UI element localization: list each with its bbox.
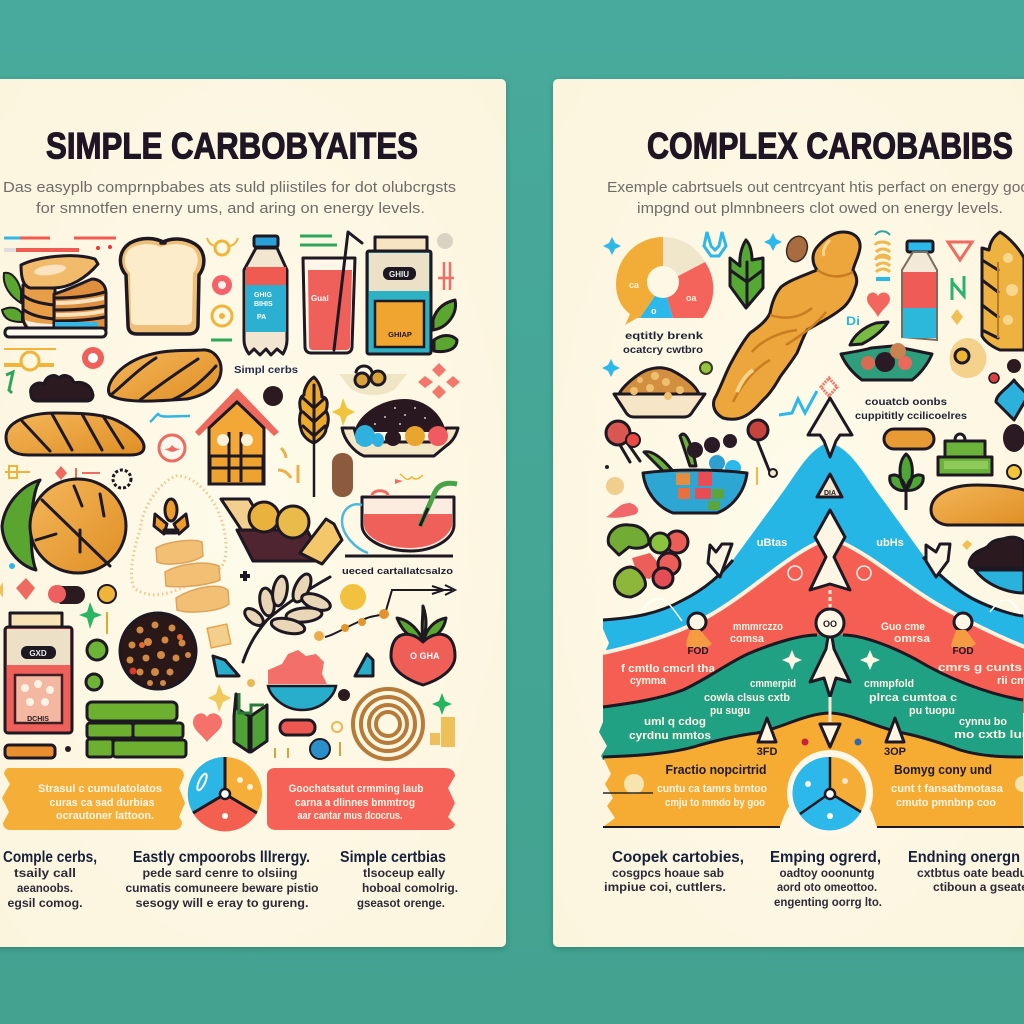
- intro text: simple carbs: Das easyplb comprnpbabes ats suld pliistiles for dot olubcrgsts: [3, 179, 456, 196]
- label: simple carbs: Simpl cerbs: [234, 365, 298, 376]
- caption: column 2: pede sard cenre to olsiing: [142, 868, 298, 880]
- intro text: complex carbs: Exemple cabrtsuels out centrcyant htis perfact on energy goo: [607, 179, 1024, 196]
- layer: red: mmmrczzo: [733, 621, 783, 633]
- layer: green: plrca cumtoa c: [869, 692, 957, 704]
- icon: wheat stalk: [300, 377, 328, 497]
- icon: big braided bread: [714, 232, 860, 419]
- icon: grain sprig in sack: [154, 499, 188, 534]
- caption: right column 1: cosgpcs hoaue sab: [612, 868, 724, 880]
- pie: yellow blue red: [188, 757, 262, 831]
- caption: column 3: [340, 849, 458, 910]
- small accent marks top left: [4, 238, 116, 250]
- label: complex carbs: [855, 396, 967, 422]
- caption: column 2: [126, 849, 318, 910]
- caption: column 3: tlsoceup eally: [363, 868, 446, 880]
- icon: golden sun: [950, 338, 987, 378]
- banner: yellow note: ocrautoner lattoon.: [56, 810, 154, 822]
- icon: growth line: [314, 585, 455, 641]
- icon: milk bottle: [244, 236, 287, 355]
- icon: ring marks: [757, 465, 1021, 485]
- caption: right column 2: engenting oorrg lto.: [774, 897, 882, 909]
- banner: red note: carna a dlinnes bmmtrog: [295, 797, 415, 809]
- layer: yellow: Bomyg cony und: [894, 762, 992, 777]
- triangle label: [817, 474, 842, 497]
- icon: small balls: [700, 359, 1021, 383]
- icon: bread slice: [120, 238, 204, 334]
- panel: simple carbohydrates: [0, 79, 506, 947]
- icon: cereal box: [367, 237, 457, 354]
- caption: right column 1: [604, 849, 744, 894]
- banner: red note: [267, 768, 455, 830]
- icon: red heart: [867, 292, 890, 317]
- arrow: down triangle: [758, 697, 904, 747]
- icon: dotted grain sack: [132, 476, 226, 595]
- caption: column 2: sesogy will e eray to gureng.: [136, 898, 308, 910]
- icon: black berries in bowl: [962, 537, 1024, 593]
- icon: green bowl with olives: [841, 322, 932, 380]
- label: slightly breaks: ocatcry cwtbro: [623, 344, 703, 356]
- intro text: simple carbs: [3, 179, 456, 217]
- icons: small yellow curls and teal bar: [875, 231, 890, 279]
- icon: blue shards: [213, 654, 373, 676]
- icon: bar below package: [5, 745, 71, 758]
- label: carb note: ueced cartallatcsalzo: [342, 566, 453, 577]
- dots and sparkles middle: [0, 563, 250, 690]
- pins: left and right: [640, 599, 1020, 657]
- icons: small medallions column: [207, 233, 454, 340]
- icon: bread basket: [221, 499, 342, 564]
- icon: plate of beans and fruits: [342, 399, 458, 456]
- layer: yellow: cunt t fansatbmotasa: [891, 783, 1004, 795]
- layer: yellow: 3FD: [757, 746, 777, 758]
- arrow: middle diamond: [810, 510, 850, 590]
- badge: center circle: OO: [823, 619, 837, 629]
- icon: heart tomato: O GHA: [410, 651, 440, 661]
- icon: blue orb and dots: [208, 679, 452, 759]
- icon: salad bowl: [643, 434, 747, 513]
- icon: black ball: [263, 386, 283, 406]
- banner: red note: Goochatsatut crmming laub: [288, 783, 424, 795]
- icon: heart: [193, 713, 222, 742]
- caption: column 1: egsil comog.: [8, 898, 82, 910]
- icon: twisted loaf: [108, 350, 221, 401]
- caption: right column 2: oadtoy ooonuntg: [780, 868, 874, 880]
- caption: right column 2: [770, 849, 882, 909]
- banner: yellow note: [2, 768, 185, 830]
- icon: cereal box: GHIAP: [388, 330, 412, 339]
- layer: red: comsa: [730, 633, 765, 645]
- icon: snack package: DCHIS: [27, 716, 49, 723]
- caption: column 3: Simple certbias: [340, 849, 446, 866]
- caption: right column 2: aord oto omeottoo.: [777, 882, 877, 894]
- layer: red: cmrs g cunts: [938, 662, 1022, 674]
- icon: corn bread: [982, 232, 1024, 350]
- icon: nuts tray: [614, 368, 705, 417]
- layer: green: uml q cdog: [644, 716, 706, 728]
- icon: complex bottle: [902, 241, 937, 340]
- icon: salmon diamond pattern: [418, 363, 460, 399]
- icon: green stacked box: [938, 434, 992, 475]
- icon: lentil bowl: [120, 613, 196, 689]
- layer: green: [599, 635, 1024, 760]
- icon: milk bottle: GHIG: [254, 292, 272, 299]
- arrow: lower: [810, 637, 850, 697]
- icon: bread slice inner: [125, 244, 198, 325]
- layer: yellow: cuntu ca tamrs brntoo: [657, 783, 767, 795]
- banner: yellow note: Strasul c cumulatolatos: [38, 783, 162, 795]
- layer: blue: [603, 442, 1024, 667]
- label: slightly breaks: [623, 330, 703, 356]
- layer: blue: uBtas: [757, 537, 787, 549]
- caption: column 2: Eastly cmpoorobs lllrergy.: [133, 849, 310, 866]
- caption: column 3: hoboal comolrig.: [362, 883, 458, 895]
- icon: green tree: [890, 454, 923, 510]
- icon: complex baguette: [931, 485, 1024, 525]
- layer: yellow: 3OP: [884, 746, 906, 758]
- icons: mini grain leaves: [278, 448, 298, 483]
- chart: donut pie: o: [651, 306, 657, 316]
- layer: green: cmmerpid: [750, 678, 796, 690]
- layer: yellow: cmuto pmnbnp coo: [896, 797, 996, 809]
- icon: coil: [353, 689, 423, 759]
- icon: triangle and marks: [948, 242, 972, 325]
- arrows: side chevrons: [708, 544, 950, 577]
- layer: blue: ubHs: [876, 537, 904, 549]
- icon: broccoli group: [608, 525, 688, 597]
- layer: red: cymma: [630, 675, 667, 687]
- layer: yellow: cmju to mmdo by goo: [665, 797, 765, 809]
- icon: brown nut: [783, 233, 811, 265]
- caption: column 1: [3, 849, 97, 910]
- layer: yellow: [603, 713, 1024, 827]
- layer: red: f cmtlo cmcrl tha: [621, 663, 716, 675]
- layer: green: mo cxtb luu: [954, 729, 1024, 741]
- caption: column 3: gseasot orenge.: [357, 898, 445, 910]
- icon: pancake stack: [2, 256, 106, 337]
- icon: cereal box: GHIU: [389, 270, 409, 279]
- panel: complex carbohydrates: [553, 79, 1024, 947]
- layer: red: [603, 543, 1024, 713]
- icon: wheat-leaf box: [234, 693, 267, 752]
- icon: juice glass with straw: [303, 232, 362, 353]
- badge: center circle: [816, 590, 844, 637]
- icon: wave and ring: [150, 414, 190, 461]
- layer: green: cmmpfold: [864, 678, 914, 690]
- icon: small dark roll: [332, 453, 353, 497]
- icon: heart tomato: [391, 606, 455, 685]
- label dots: iD: Di: [846, 314, 860, 328]
- chart: donut pie: ca: [629, 280, 640, 290]
- intro text: complex carbs: impgnd out plmnbneers clot owed on energy levels.: [637, 200, 1003, 217]
- layer: green: cynnu bo: [959, 716, 1007, 728]
- icon: blue zigzag and diamond: [779, 378, 837, 415]
- icon: house with grain: [195, 388, 279, 484]
- triangle label: DIA: [824, 490, 836, 497]
- icon: golden coin: [340, 584, 366, 610]
- caption: column 2: cumatis comuneere beware pistio: [126, 883, 318, 895]
- icon: blue leaf with berry: [996, 380, 1024, 452]
- icon: snack package: GXD: [29, 649, 47, 658]
- icon: complex pill: [884, 429, 934, 449]
- layer: green: pu sugu: [710, 705, 750, 717]
- title: simple carbs: SIMPLE CARBOBYAITES: [46, 126, 418, 166]
- caption: right column 3: ctiboun a gseate: [933, 882, 1024, 894]
- icon: wheat sprig: [242, 571, 332, 662]
- layer: red: omrsa: [894, 633, 931, 645]
- layer: green: cowla clsus cxtb: [704, 692, 790, 704]
- icon: small bowl of nuts: [339, 366, 407, 395]
- icon: fruit bowl: [268, 650, 336, 710]
- icon: juice glass with straw: Gual: [311, 294, 329, 303]
- label: complex carbs: cuppititly ccilicoelres: [855, 410, 967, 422]
- caption: right column 1: impiue coi, cuttlers.: [604, 882, 726, 894]
- caption: column 1: aeanoobs.: [17, 883, 73, 895]
- banner: red note: aar cantar mus dcocrus.: [298, 810, 402, 822]
- chart: donut pie: [616, 237, 713, 325]
- icon: green stack: [87, 702, 186, 757]
- icon: round loaf with leaf: [2, 479, 126, 573]
- icon: tan bean and meat: [605, 465, 638, 518]
- intro text: complex carbs: [607, 179, 1024, 217]
- icon: snack package: [5, 613, 72, 733]
- caption: right column 2: Emping ogrerd,: [770, 849, 881, 866]
- banner: yellow note: curas ca sad durbias: [50, 797, 154, 809]
- chart: donut pie: oa: [686, 293, 697, 303]
- decorative blue marks: [602, 232, 782, 377]
- layer: green: pu tuopu: [909, 705, 955, 717]
- caption: column 1: tsaily call: [14, 868, 76, 880]
- icon: baguette: [6, 413, 144, 455]
- pyramid: layered energy mountain: [599, 398, 1024, 836]
- label: complex carbs: couatcb oonbs: [865, 396, 947, 408]
- caption: right column 1: Coopek cartobies,: [612, 849, 744, 866]
- layer: red: Guo cme: [881, 621, 925, 633]
- row decorative icons left: [4, 347, 104, 393]
- icon: milk bottle: PA: [257, 314, 266, 321]
- icon: soup cup: [342, 483, 457, 556]
- row accents: [5, 466, 423, 488]
- caption: column 1: Comple cerbs,: [3, 849, 97, 866]
- icon: milk bottle: BIHIS: [254, 301, 273, 308]
- layer: yellow: Fractio nopcirtrid: [666, 762, 767, 777]
- icon: stacked golden slices: [156, 540, 229, 612]
- icon: wheat leaf: [730, 240, 763, 308]
- pins: left and right: FOD: [952, 646, 974, 657]
- arrow: top: [808, 398, 852, 457]
- icon: sparkle: [332, 398, 355, 426]
- intro text: simple carbs: for smnotfen enerny ums, and aring on energy levels.: [36, 200, 425, 217]
- gauge: circular pie: [787, 750, 873, 836]
- caption: right column 3: [908, 849, 1024, 894]
- pins: left and right: FOD: [687, 646, 709, 657]
- icon: black berries: [31, 376, 93, 401]
- label: slightly breaks: eqtitly brenk: [625, 330, 703, 342]
- icon: mini bar chart: [430, 717, 455, 747]
- layer: green: cyrdnu mmtos: [629, 730, 711, 742]
- icon: red pill: [280, 720, 315, 735]
- icon: lollipops: [606, 420, 771, 475]
- caption: right column 3: cxtbtus oate beadu: [917, 868, 1024, 880]
